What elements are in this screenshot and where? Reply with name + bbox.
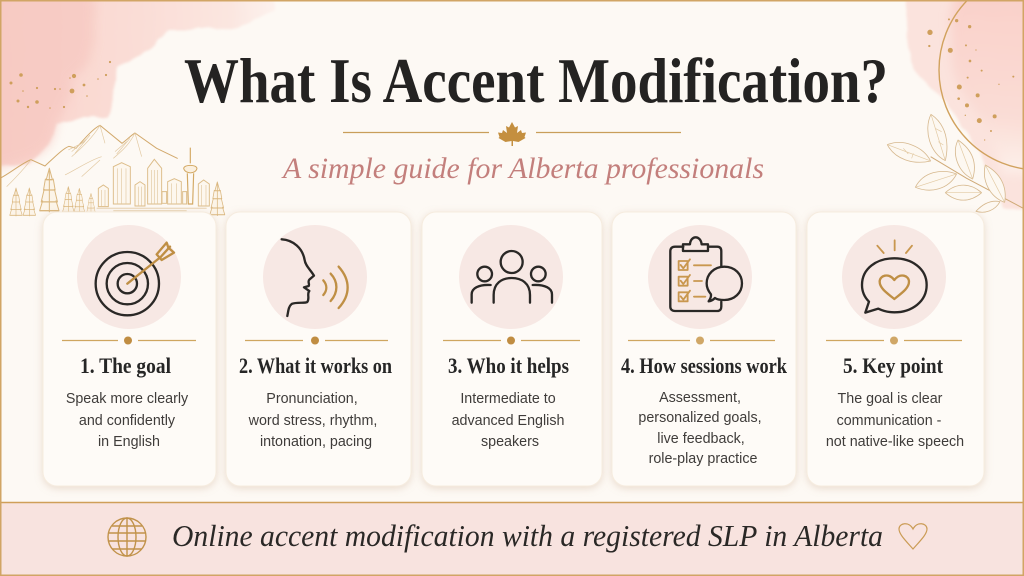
title: What Is Accent Modification? xyxy=(184,45,888,116)
icon: speaking profile with sound waves xyxy=(263,225,367,329)
body text: live feedback, xyxy=(657,431,745,447)
leaf branch illustration xyxy=(887,114,1023,212)
body text: Speak more clearly xyxy=(66,391,189,407)
heading: 4. How sessions work xyxy=(621,353,788,378)
icon: heart outline xyxy=(899,524,927,549)
body text: and confidently xyxy=(79,413,176,429)
body text: communication - xyxy=(837,413,942,429)
body text: advanced English xyxy=(452,413,564,429)
footer banner xyxy=(0,502,1024,576)
trees xyxy=(10,188,22,216)
body text: word stress, rhythm, xyxy=(248,413,377,429)
body text: Intermediate to xyxy=(460,391,556,407)
mountain and city skyline illustration xyxy=(0,125,225,216)
ground hatching xyxy=(97,208,207,211)
panel: 2. What it works on xyxy=(226,212,411,486)
icon: maple leaf xyxy=(498,122,526,146)
panel: 5. Key point xyxy=(807,212,984,486)
gold speckles: top right xyxy=(927,18,1014,141)
divider xyxy=(826,336,962,344)
body text: Pronunciation, xyxy=(266,391,358,407)
body text: not native-like speech xyxy=(826,434,964,450)
icon: speech bubble with heart xyxy=(842,225,946,329)
mountains xyxy=(0,125,177,178)
gold ring xyxy=(939,0,1024,170)
heading: 3. Who it helps xyxy=(448,353,569,378)
body text: personalized goals, xyxy=(638,410,762,426)
body text: in English xyxy=(98,434,160,450)
body text: Assessment, xyxy=(659,390,741,406)
heading: 1. The goal xyxy=(80,353,171,378)
body text: speakers xyxy=(481,434,539,450)
panel: 4. How sessions work xyxy=(612,212,796,486)
divider xyxy=(245,336,388,344)
footer text: Online accent modification with a registered SLP in Alberta xyxy=(172,518,883,553)
icon: globe xyxy=(108,518,146,556)
panel: 1. The goal xyxy=(43,212,216,486)
icon: three people xyxy=(459,225,563,329)
body text: role-play practice xyxy=(649,451,757,467)
divider xyxy=(62,336,196,344)
icon: clipboard checklist and speech bubble xyxy=(648,225,752,329)
icon: target and arrow xyxy=(77,225,181,329)
title divider with maple leaf xyxy=(343,122,681,146)
divider xyxy=(443,336,580,344)
body text: intonation, pacing xyxy=(260,434,372,450)
subtitle: A simple guide for Alberta professionals xyxy=(281,152,764,185)
watercolor wash: top left xyxy=(0,0,275,168)
gold speckles: top left xyxy=(10,61,111,109)
divider xyxy=(628,336,775,344)
watercolor wash: top right xyxy=(906,0,1024,208)
panel: 3. Who it helps xyxy=(422,212,602,486)
heading: 5. Key point xyxy=(843,353,944,378)
body text: The goal is clear xyxy=(838,391,943,407)
heading: 2. What it works on xyxy=(239,353,392,378)
buildings xyxy=(98,159,209,207)
tower xyxy=(187,148,194,204)
